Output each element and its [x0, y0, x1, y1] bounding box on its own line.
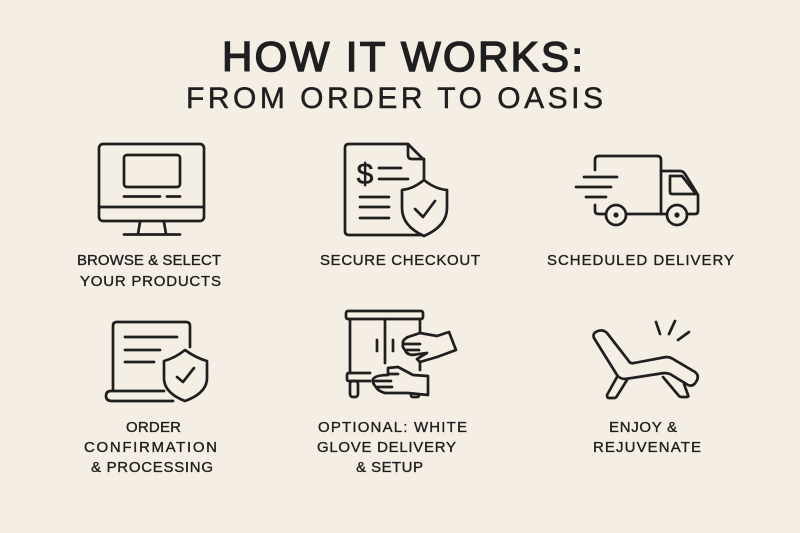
- panel: enjoy and rejuvenate: [593, 321, 701, 456]
- label: order confirmation: [84, 419, 217, 476]
- label: browse and select: YOUR PRODUCTS: [80, 273, 221, 290]
- title: HOW IT WORKS:: [222, 33, 583, 80]
- icon: lower hand: [373, 367, 428, 395]
- label: white glove delivery: OPTIONAL: WHITE: [318, 419, 467, 436]
- label: browse and select: [77, 252, 221, 290]
- icon: delivery truck: [576, 156, 698, 225]
- panel: order confirmation: [84, 322, 217, 476]
- panel: scheduled delivery: [547, 156, 734, 269]
- icon: upper hand: [403, 332, 456, 362]
- panel: secure checkout: [320, 144, 480, 269]
- icon: invoice with shield: [345, 144, 447, 236]
- icon: desktop monitor: [99, 144, 204, 234]
- label: scheduled delivery: SCHEDULED DELIVERY: [547, 252, 734, 269]
- icon: lounge chair: [594, 321, 698, 398]
- title: FROM ORDER TO OASIS: [186, 82, 603, 115]
- label: order confirmation: CONFIRMATION: [84, 439, 217, 456]
- label: white glove delivery: GLOVE DELIVERY: [317, 439, 456, 456]
- label: white glove delivery: [317, 419, 467, 476]
- icon: cabinet with hands: [346, 311, 456, 397]
- panel: white glove delivery: [317, 311, 467, 476]
- label: white glove delivery: & SETUP: [356, 459, 423, 476]
- icon text: dollar sign: $: [357, 158, 374, 191]
- icon: truck wheel hubs: [613, 212, 680, 218]
- label: enjoy and rejuvenate: REJUVENATE: [593, 439, 701, 456]
- panel: browse and select: [77, 144, 221, 290]
- label: browse and select: BROWSE & SELECT: [77, 252, 221, 269]
- title: [186, 33, 603, 115]
- label: order confirmation: & PROCESSING: [91, 459, 213, 476]
- icon: laptop with shield: [106, 322, 207, 401]
- label: secure checkout: SECURE CHECKOUT: [320, 252, 480, 269]
- label: order confirmation: ORDER: [126, 419, 181, 436]
- label: enjoy and rejuvenate: ENJOY &: [609, 419, 677, 436]
- label: enjoy and rejuvenate: [593, 419, 701, 456]
